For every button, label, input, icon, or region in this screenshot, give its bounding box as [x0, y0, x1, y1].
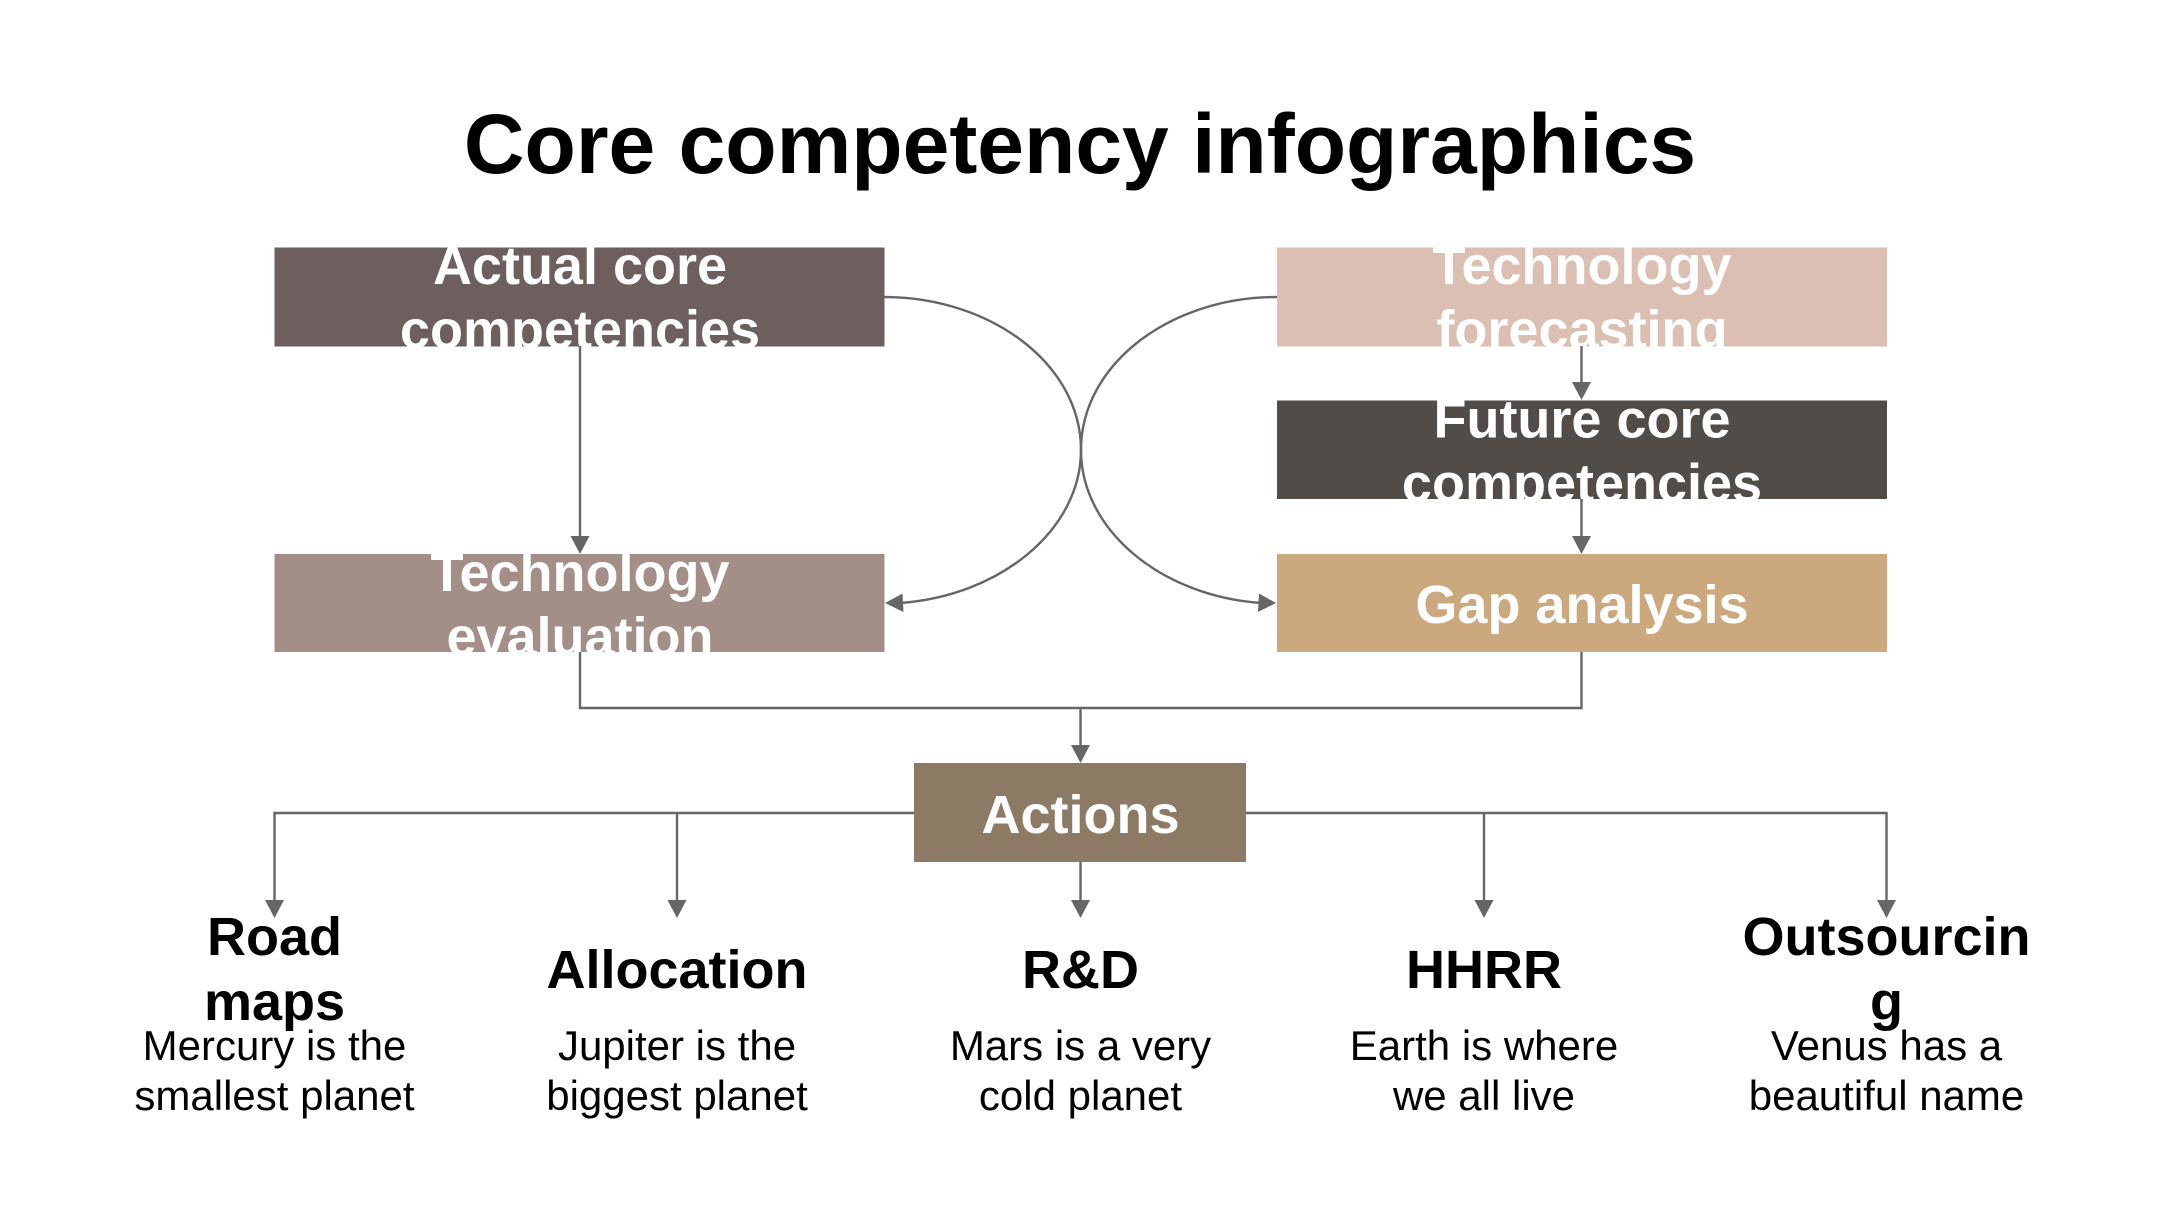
box: future core competencies: Future core [1433, 390, 1731, 450]
arrow: evaluation and gap analysis merge into actions [580, 652, 1582, 763]
arrow: actions to R&amp;D [1071, 862, 1090, 918]
column: outsourcing [1742, 907, 2031, 1119]
column: R&amp;D [950, 940, 1211, 1119]
column: R&amp;D: Mars is a very [950, 1022, 1211, 1069]
column: road maps [134, 907, 415, 1119]
arrow: curve from technology forecasting to gap analysis [1081, 297, 1277, 612]
arrow: actions to right outcomes [1246, 813, 1896, 918]
arrow: future core competencies to gap analysis [1572, 499, 1591, 554]
column: R&amp;D: cold planet [979, 1072, 1182, 1119]
column: outsourcing: g [1870, 972, 1903, 1032]
column: road maps: Mercury is the [143, 1022, 406, 1069]
column: outsourcing: Outsourcin [1742, 907, 2031, 967]
box: gap analysis: Gap analysis [1415, 575, 1749, 635]
column: HHRR [1350, 940, 1618, 1119]
box: actual core competencies: competencies [400, 300, 760, 360]
box: technology forecasting: Technology [1432, 236, 1732, 296]
box: future core competencies [1277, 390, 1887, 514]
column: HHRR: Earth is where [1350, 1022, 1618, 1069]
column: HHRR: HHRR [1406, 940, 1562, 1000]
box: technology forecasting: forecasting [1436, 300, 1728, 360]
column: road maps: smallest planet [134, 1072, 415, 1119]
box: actual core competencies: Actual core [433, 236, 727, 296]
title: Core competency infographics [464, 97, 1696, 191]
arrow: actual core competencies to technology evaluation [570, 346, 590, 554]
column: R&amp;D: R&D [1022, 940, 1139, 1000]
box: actions [914, 763, 1246, 862]
column: allocation: biggest planet [546, 1072, 808, 1119]
column: road maps: Road [207, 907, 342, 967]
box: technology evaluation: Technology [430, 543, 730, 603]
column: outsourcing: Venus has a [1771, 1022, 2003, 1069]
arrow: technology forecasting to future core competencies [1572, 346, 1591, 400]
box: future core competencies: competencies [1402, 454, 1762, 514]
box: technology evaluation [274, 543, 884, 667]
column: allocation: Jupiter is the [558, 1022, 796, 1069]
column: allocation [546, 940, 808, 1119]
box: actions: Actions [981, 785, 1180, 845]
box: technology forecasting [1277, 236, 1887, 360]
box: actual core competencies [274, 236, 884, 360]
column: road maps: maps [204, 972, 345, 1032]
arrow: curve from actual core competencies to technology evaluation [884, 297, 1081, 612]
column: allocation: Allocation [546, 940, 808, 1000]
box: gap analysis [1277, 554, 1887, 652]
column: outsourcing: beautiful name [1749, 1072, 2024, 1119]
arrow: actions to left outcomes [265, 813, 914, 918]
column: HHRR: we all live [1392, 1072, 1575, 1119]
box: technology evaluation: evaluation [446, 607, 714, 667]
